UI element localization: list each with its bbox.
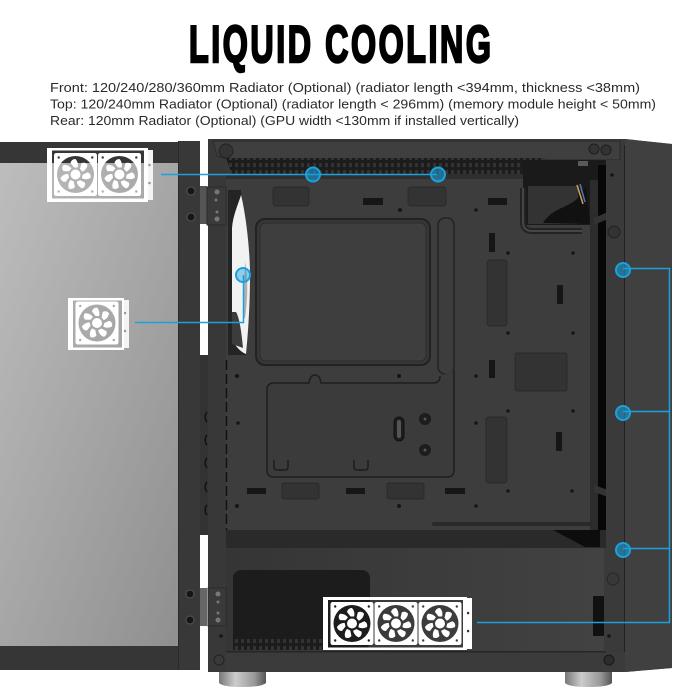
cable opening — [523, 160, 607, 225]
icon: single-fan 120mm radiator (rear) — [68, 298, 129, 350]
motherboard tray — [226, 179, 590, 530]
routing channel — [523, 188, 582, 231]
specification text block: Rear: 120mm Radiator (Optional) (GPU width <130mm if installed vertically) — [50, 113, 519, 128]
door hinges — [200, 186, 226, 626]
case chassis body — [200, 139, 672, 672]
motherboard standoffs — [394, 413, 431, 456]
specification text block: Front: 120/240/280/360mm Radiator (Optional) (radiator length <394mm, thickness <38mm) — [50, 80, 640, 95]
callout: rear radiator leader — [135, 268, 250, 322]
callout: top radiator leader — [161, 168, 445, 182]
front right post — [606, 160, 625, 652]
specification text block — [50, 80, 656, 128]
specification text block: Top: 120/240mm Radiator (Optional) (radiator length < 296mm) (memory module height < 50mm) — [50, 96, 656, 112]
title: LIQUID COOLING — [189, 16, 491, 74]
case feet — [219, 672, 612, 687]
front fan seen edge-on — [228, 190, 250, 355]
callout: front radiator leader — [477, 263, 670, 622]
top frame — [213, 141, 620, 160]
icon: triple-fan 360mm radiator (front) — [323, 597, 472, 650]
icon: dual-fan 240mm radiator (top) — [47, 148, 153, 202]
side panel — [625, 139, 672, 672]
tray cut-outs — [219, 173, 620, 638]
power supply shroud — [214, 144, 625, 672]
open glass door panel — [0, 141, 200, 670]
top vent mesh — [226, 158, 545, 175]
